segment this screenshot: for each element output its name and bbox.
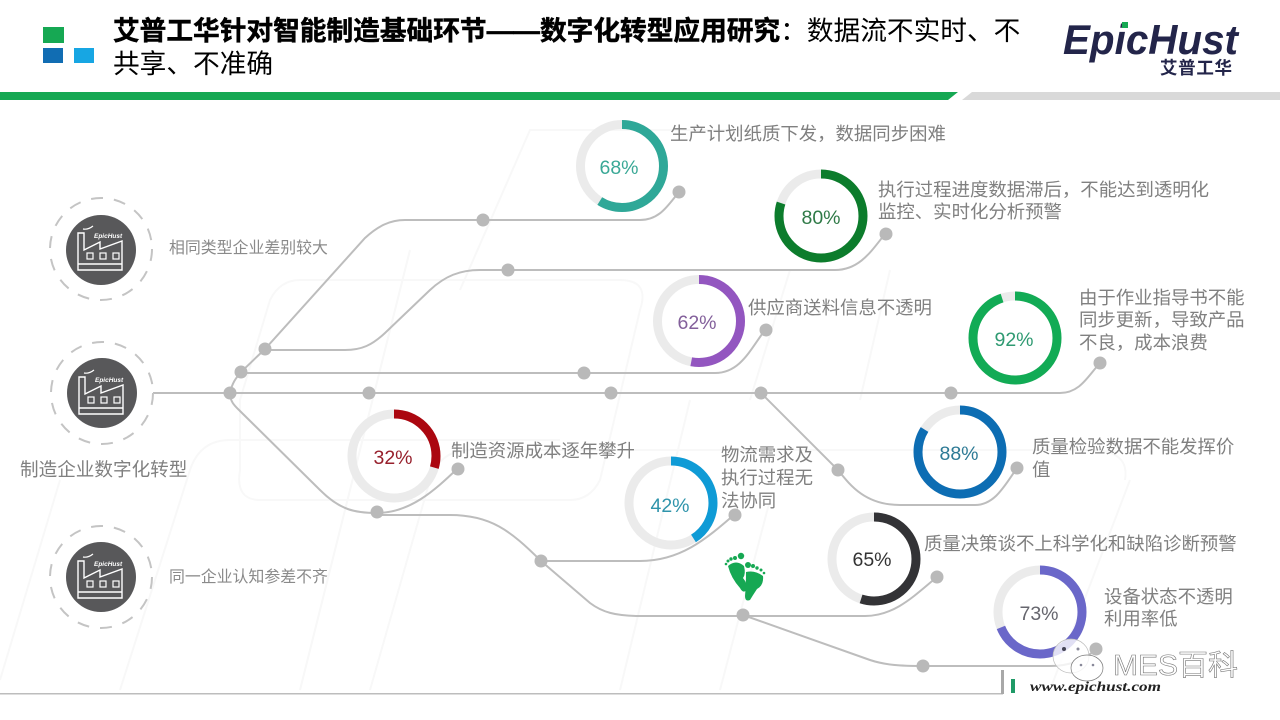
label 92%: 不良，成本浪费: [1079, 332, 1208, 353]
donut 42%: [629, 461, 713, 545]
factory icon 3: EpicHust: [94, 561, 123, 568]
title: [113, 16, 1020, 79]
label: digital transformation: 制造企业数字化转型: [20, 459, 187, 480]
label 42%: [721, 444, 813, 511]
bottom rule and footer marks: [0, 670, 1015, 694]
donut 73%: [998, 570, 1082, 654]
donut 68%: [580, 124, 664, 208]
donut 65%: [832, 517, 916, 601]
label 62%: 供应商送料信息不透明: [748, 297, 932, 318]
donut 73%: 73%: [1019, 603, 1059, 625]
connecting route lines: [153, 192, 1100, 666]
factory icon 1: [50, 198, 152, 300]
label: same enterprise: 同一企业认知参差不齐: [169, 568, 328, 586]
label 88%: [1032, 436, 1234, 480]
label 73%: 利用率低: [1104, 608, 1178, 629]
label 65%: 质量决策谈不上科学化和缺陷诊断预警: [924, 533, 1237, 554]
logo: EpicHust: 艾普工华: [1160, 58, 1232, 78]
label 68%: 生产计划纸质下发，数据同步困难: [670, 123, 946, 144]
label 88%: 质量检验数据不能发挥价: [1032, 436, 1234, 457]
donut 65%: 65%: [852, 549, 892, 571]
label: same-type enterprises: 相同类型企业差别较大: [169, 239, 328, 257]
factory icon 2: [51, 342, 153, 444]
label 88%: 值: [1032, 459, 1050, 480]
donut 92%: [973, 296, 1057, 380]
donut 88%: [918, 410, 1002, 494]
label 92%: 由于作业指导书不能: [1079, 287, 1245, 308]
label 42%: 法协同: [721, 490, 776, 511]
icon: green footprints: [725, 553, 765, 600]
header icon: coloured squares: [43, 27, 94, 63]
factory icon 3: [50, 526, 152, 628]
label 80%: 监控、实时化分析预警: [878, 201, 1062, 222]
donut 88%: 88%: [939, 443, 979, 465]
label 32%: 制造资源成本逐年攀升: [451, 440, 635, 461]
label 92%: [1079, 287, 1245, 353]
donut 42%: 42%: [650, 495, 690, 517]
logo: EpicHust: EpicHust: [1063, 16, 1240, 63]
header divider bar: [0, 92, 1280, 100]
watermark: wechat icon: [1053, 639, 1103, 681]
label 80%: 执行过程进度数据滞后，不能达到透明化: [878, 179, 1209, 200]
label 92%: 同步更新，导致产品: [1079, 309, 1245, 330]
title: 艾普工华针对智能制造基础环节——数字化转型应用研究：数据流不实时、不: [113, 16, 1020, 46]
route nodes: [224, 186, 1106, 672]
donut 62%: [658, 280, 740, 362]
watermark: MES百科: MES百科: [1113, 649, 1238, 682]
donut 32%: 32%: [373, 447, 413, 469]
footer url: www.epichust.com: [1030, 680, 1161, 695]
label 42%: 执行过程无: [721, 467, 813, 488]
factory icon 1: EpicHust: [94, 233, 123, 240]
label 73%: 设备状态不透明: [1104, 586, 1233, 607]
donut 80%: 80%: [801, 207, 841, 229]
donut 80%: [779, 174, 863, 258]
donut 62%: 62%: [677, 312, 717, 334]
title: 共享、不准确: [113, 49, 273, 79]
donut 68%: 68%: [599, 157, 639, 179]
label 42%: 物流需求及: [721, 444, 813, 465]
donut 92%: 92%: [994, 329, 1034, 351]
factory icon 2: EpicHust: [95, 377, 124, 384]
label 80%: [878, 179, 1209, 222]
label 73%: [1104, 586, 1233, 629]
donut 32%: [352, 414, 436, 498]
